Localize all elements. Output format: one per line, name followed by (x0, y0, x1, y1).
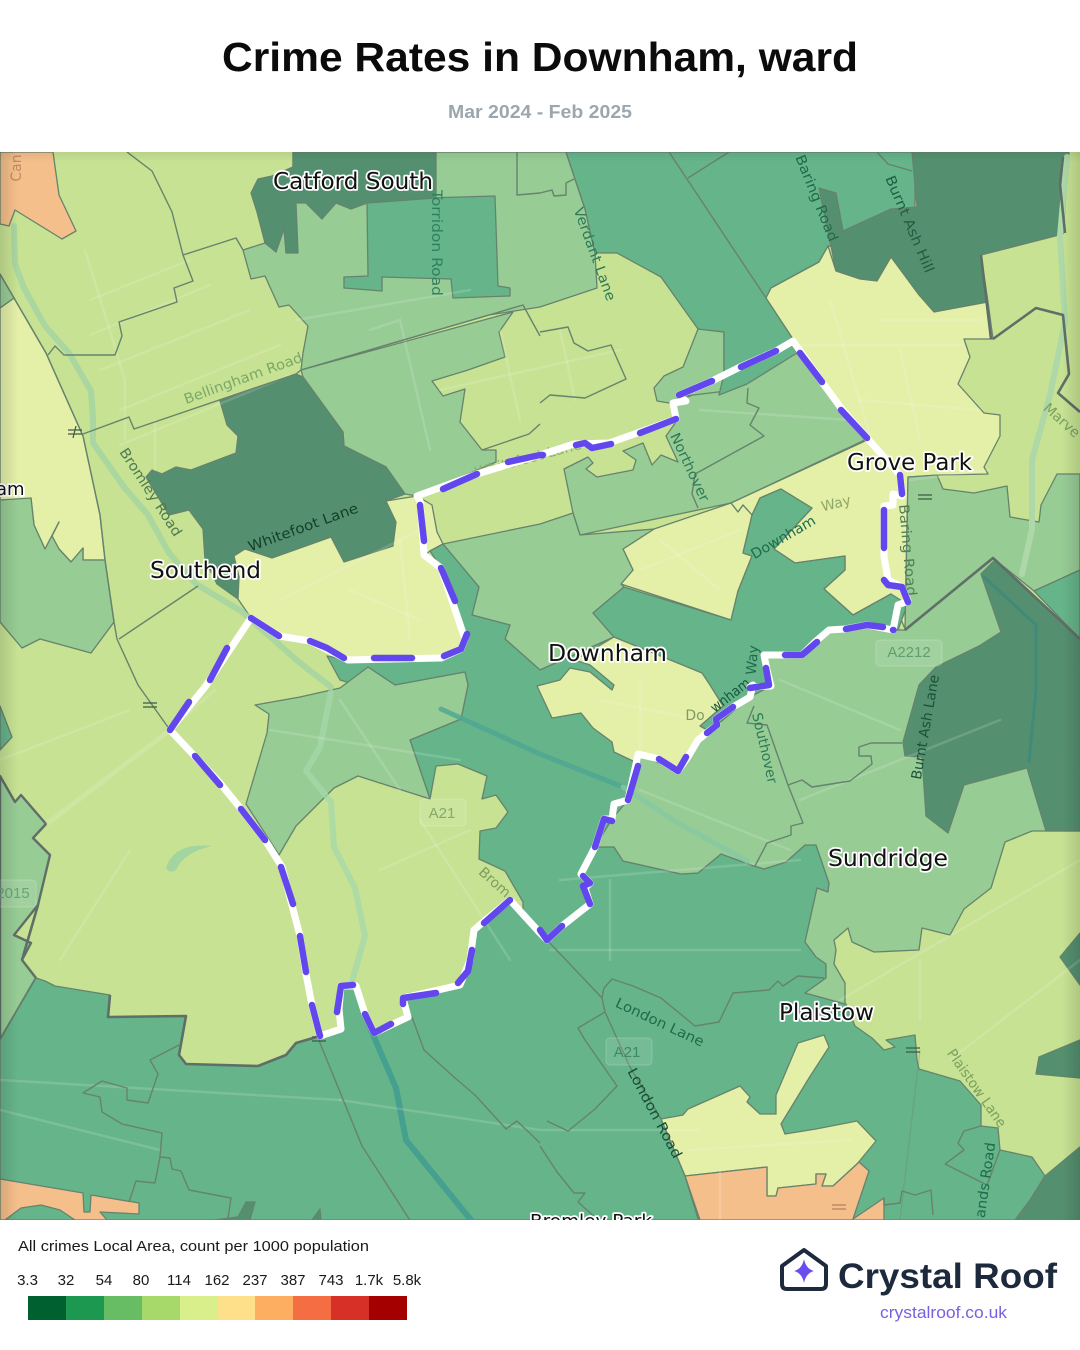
place labels: Bromley Park (530, 1211, 653, 1232)
logo wordmark: Crystal Roof (838, 1257, 1057, 1296)
road network (0, 250, 1080, 1220)
place labels: Downham (548, 641, 667, 667)
road labels: Way (820, 493, 853, 515)
subtitle: date range: Mar 2024 - Feb 2025 (448, 102, 632, 122)
choropleth areas (0, 152, 1080, 1220)
legend values: 162 (204, 1272, 230, 1289)
website url: crystalroof.co.uk (880, 1304, 1008, 1322)
road shields: A2212 (887, 644, 931, 661)
legend values: 743 (318, 1272, 344, 1289)
road labels: Brom (475, 864, 514, 901)
road labels: Burnt Ash Lane (909, 674, 943, 781)
place labels: Southend (150, 558, 261, 584)
road labels: Baring Road (895, 504, 919, 597)
legend values: 5.8k (393, 1272, 422, 1289)
legend values: 54 (96, 1272, 112, 1289)
legend values: 3.3 (17, 1272, 38, 1289)
road labels: Bromley Road (116, 445, 185, 540)
road labels: Bellingham Road (182, 350, 305, 408)
legend values: 1.7k (355, 1272, 384, 1289)
legend values: 387 (280, 1272, 306, 1289)
road labels: London Road (624, 1066, 685, 1161)
road labels: Do (685, 708, 705, 724)
place labels: Catford South (273, 169, 433, 195)
road labels: Verdant Lane (570, 206, 618, 303)
road labels: Baring Road (791, 153, 841, 244)
road labels: Plaistow Lane (943, 1046, 1009, 1131)
road shields: A21 (429, 805, 455, 822)
map edge shading (0, 152, 1080, 1220)
road labels: Can (9, 154, 25, 182)
place labels: Plaistow (779, 1000, 874, 1026)
road labels: Southover (748, 711, 780, 785)
road shields: A21 (614, 1044, 640, 1061)
road labels: Downham (748, 513, 819, 563)
ward boundary: Downham (170, 341, 908, 1036)
road labels: Northover (666, 431, 712, 505)
logo: Crystal Roof (782, 1250, 1057, 1322)
legend values: 80 (133, 1272, 149, 1289)
legend values: 32 (58, 1272, 74, 1289)
legend values (17, 1272, 422, 1289)
legend values: 114 (167, 1272, 191, 1289)
icon: house with star (782, 1250, 826, 1289)
boundary lines (0, 152, 1080, 1225)
road labels: Torridon Road (428, 189, 444, 296)
legend values: 237 (242, 1272, 268, 1289)
legend colour scale (28, 1296, 407, 1320)
rivers (14, 157, 1067, 1225)
title: Crime Rates in Downham, ward (222, 34, 858, 80)
road labels (9, 153, 1080, 1219)
legend title: All crimes Local Area, count per 1000 population (18, 1239, 369, 1255)
road shields (0, 640, 942, 1065)
road labels: wnham (708, 675, 754, 716)
legend (17, 1239, 422, 1320)
map base colour (0, 152, 1080, 1220)
place labels: Grove Park (847, 450, 973, 476)
road labels: London Lane (613, 995, 706, 1050)
road labels: Whitefoot Lane (473, 437, 583, 481)
road labels: Way (744, 645, 762, 676)
road labels: ands Road (973, 1141, 999, 1219)
road labels: Burnt Ash Hill (881, 173, 937, 275)
place labels: Sundridge (828, 846, 948, 872)
station markers (68, 426, 932, 1209)
road labels: Whitefoot Lane (246, 501, 361, 555)
panel: choropleth map (0, 152, 1080, 1232)
place labels (0, 169, 973, 1232)
